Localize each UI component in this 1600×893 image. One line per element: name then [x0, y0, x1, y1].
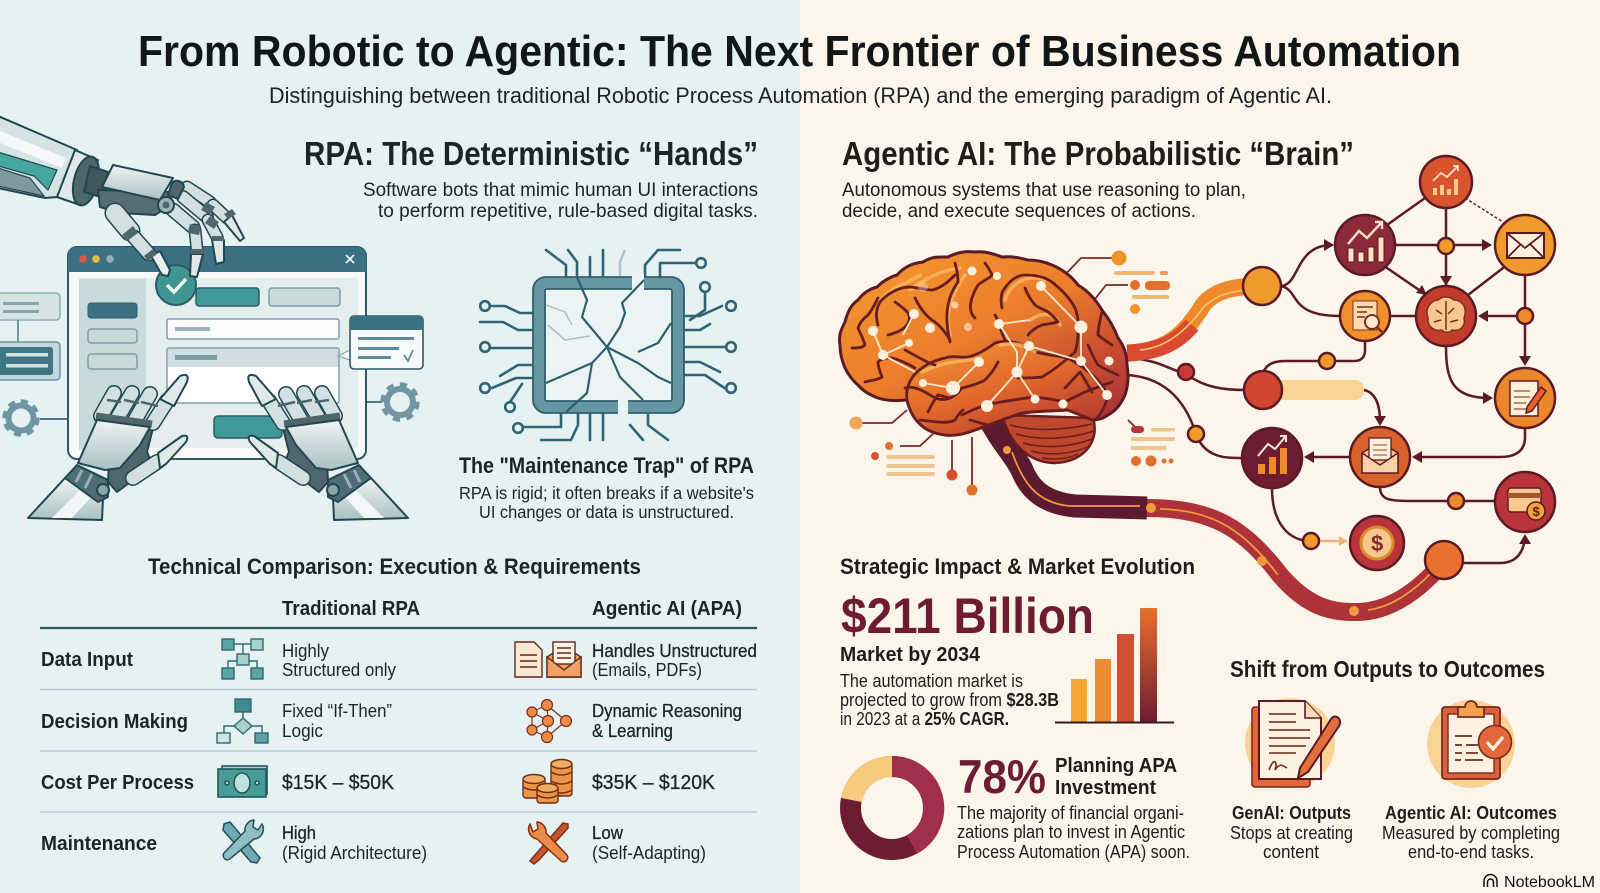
APA values: & Learning: [592, 720, 673, 741]
icon: neural network: [527, 700, 572, 742]
label: GenAI outputs: Stops at creating: [1230, 823, 1353, 843]
label: GenAI outputs: [1230, 802, 1353, 862]
node: card: [1495, 472, 1555, 532]
RPA values: Highly: [282, 640, 330, 661]
node: chart: [1335, 215, 1395, 275]
popup note: [338, 316, 423, 369]
subtitle: Distinguishing between traditional Robotic Process Automation (RPA) and the emerging paradigm of Agentic AI.: [269, 83, 1332, 108]
right robot hand: [248, 375, 408, 520]
RPA values: (Rigid Architecture): [282, 842, 427, 863]
bar chart: [1055, 608, 1174, 722]
text: market description: The automation market is: [840, 671, 1023, 691]
node: brain: [1416, 286, 1476, 346]
background: right panel: [800, 0, 1600, 893]
illustration: brain: [839, 250, 1175, 496]
background: left panel: [0, 0, 800, 893]
text: Agentic AI description: decide, and execute sequences of actions.: [842, 200, 1196, 222]
column headers: Traditional RPA: [282, 597, 420, 620]
palm: [98, 190, 172, 215]
donut chart: [850, 766, 934, 850]
APA values: Low: [592, 822, 624, 843]
neural network overlay: [868, 266, 1114, 412]
temporal lobe: [907, 341, 1108, 435]
text: maintenance trap description: RPA is rigid; it often breaks if a website's: [459, 483, 754, 503]
text: APA description: The majority of financial organi-: [957, 803, 1184, 823]
row labels: Data Input: [41, 648, 133, 671]
label: Agentic AI outcomes: [1382, 802, 1560, 862]
APA values: (Self-Adapting): [592, 842, 706, 863]
RPA values: Logic: [282, 720, 323, 741]
text: Agentic AI description: Autonomous systems that use reasoning to plan,: [842, 179, 1246, 201]
text: RPA description: Software bots that mimic human UI interactions: [363, 179, 758, 201]
upper orange pathway: [1127, 286, 1262, 353]
RPA values: Fixed “If-Then”: [282, 700, 392, 721]
brain folds: [852, 263, 1118, 425]
text: maintenance trap description: UI changes or data is unstructured.: [479, 502, 734, 522]
right gear: [366, 385, 417, 419]
column headers: Agentic AI (APA): [592, 597, 742, 620]
heading: strategic impact: Strategic Impact & Market Evolution: [840, 554, 1195, 579]
cerebellum: [1002, 415, 1095, 463]
text: market description: [840, 671, 1059, 729]
text: market description: in 2023 at a 25% CAGR.: [840, 709, 1009, 729]
label: GenAI outputs: content: [1263, 842, 1319, 862]
RPA values: Structured only: [282, 659, 397, 680]
panel: technical comparison table: [40, 554, 757, 864]
left floating cards: [0, 293, 60, 380]
icon: orange tools: [529, 822, 568, 864]
title: From Robotic to Agentic: The Next Frontier of Business Automation: [138, 27, 1461, 76]
text: RPA description: [363, 179, 758, 222]
column headers: [282, 597, 742, 620]
label: Agentic AI outcomes: Measured by completing: [1382, 823, 1560, 843]
text: APA description: Process Automation (APA) soon.: [957, 842, 1190, 862]
icon: documents: [515, 642, 581, 677]
forearm: [0, 116, 108, 208]
APA values: (Emails, PDFs): [592, 659, 702, 680]
browser window: [68, 247, 366, 459]
junction nodes: [1243, 267, 1463, 579]
stat: market size: $211 Billion: [841, 588, 1094, 644]
APA values: Dynamic Reasoning: [592, 700, 742, 721]
node: growth chart: [1242, 428, 1302, 488]
panel: RPA: [0, 116, 758, 522]
icon: teal tools: [223, 820, 263, 863]
text: maintenance trap description: [459, 483, 754, 522]
icon: clipboard and check: [1427, 700, 1515, 788]
back fingers: [173, 187, 244, 277]
label: Agentic AI outcomes: Agentic AI: Outcomes: [1385, 802, 1557, 823]
row labels: Cost Per Process: [41, 771, 194, 794]
icon: money: [218, 766, 267, 797]
panel: Agentic AI: [839, 135, 1555, 616]
text: RPA description: to perform repetitive, rule-based digital tasks.: [378, 200, 758, 222]
RPA values: High: [282, 822, 316, 843]
cerebrum: [839, 252, 1128, 435]
text: APA description: [957, 803, 1190, 862]
label: Agentic AI outcomes: end-to-end tasks.: [1408, 842, 1534, 862]
left robot hand: [28, 375, 188, 520]
annotation marks around brain: [850, 250, 1175, 496]
heading: Agentic AI: Agentic AI: The Probabilistic “Brain”: [842, 135, 1354, 172]
heading: technical comparison: Technical Comparison: Execution & Requirements: [148, 554, 641, 579]
thumb: [115, 213, 170, 276]
node: envelope: [1350, 427, 1410, 487]
illustration: cracked circuit chip: [480, 250, 736, 440]
node: card: $: [1532, 504, 1540, 519]
node: dollar: $: [1371, 531, 1383, 556]
stat label: APA investment: Planning APA: [1055, 754, 1177, 777]
arrowheads: [1304, 239, 1531, 544]
APA values: Handles Unstructured: [592, 640, 757, 661]
node: document search: [1340, 291, 1390, 341]
NotebookLM logo: NotebookLM: [1504, 874, 1595, 891]
heading: RPA: RPA: The Deterministic “Hands”: [304, 135, 758, 172]
small connector dots: [1178, 238, 1533, 549]
text: APA description: zations plan to invest in Agentic: [957, 822, 1185, 842]
brain highlights: [880, 268, 1060, 372]
panel: strategic impact: [840, 554, 1195, 862]
RPA values: $15K – $50K: [282, 772, 395, 794]
stat label: Market by 2034: [840, 643, 981, 666]
heading: outputs to outcomes: Shift from Outputs to Outcomes: [1230, 656, 1545, 682]
row labels: [41, 648, 194, 855]
APA values: [592, 640, 757, 863]
heading: maintenance trap: The "Maintenance Trap" of RPA: [459, 453, 754, 478]
connectors: agent workflow network: [1127, 198, 1531, 563]
node: document pen: [1495, 368, 1555, 428]
row labels: Decision Making: [41, 710, 188, 733]
RPA values: [282, 640, 427, 863]
left gear: [5, 402, 68, 434]
illustration: robot hands on browser window: [0, 116, 423, 520]
stat label: APA investment: [1055, 754, 1177, 799]
robot arm and hand: [0, 116, 244, 277]
row labels: Maintenance: [41, 832, 157, 855]
back-of-hand plate: [102, 165, 173, 200]
APA values: $35K – $120K: [592, 772, 716, 794]
node: top chart: [1420, 156, 1472, 208]
text: Agentic AI description: [842, 179, 1246, 222]
node: mail: [1495, 215, 1555, 275]
pale pill bar: [1270, 380, 1364, 400]
icon: decision flow: [217, 699, 268, 743]
panel: outputs to outcomes: [1230, 656, 1560, 862]
text: market description: projected to grow from $28.3B: [840, 690, 1059, 710]
stat label: APA investment: Investment: [1055, 776, 1156, 799]
icon: coins: [523, 760, 572, 803]
icon: document and pen: [1245, 698, 1340, 788]
label: GenAI outputs: GenAI: Outputs: [1232, 802, 1351, 823]
brain stem and lower pathway: [990, 420, 1445, 616]
icon: structured data: [222, 639, 263, 679]
check badge: [156, 265, 196, 305]
node: dollar: [1350, 516, 1404, 570]
stat: 78 percent: 78%: [958, 750, 1046, 803]
